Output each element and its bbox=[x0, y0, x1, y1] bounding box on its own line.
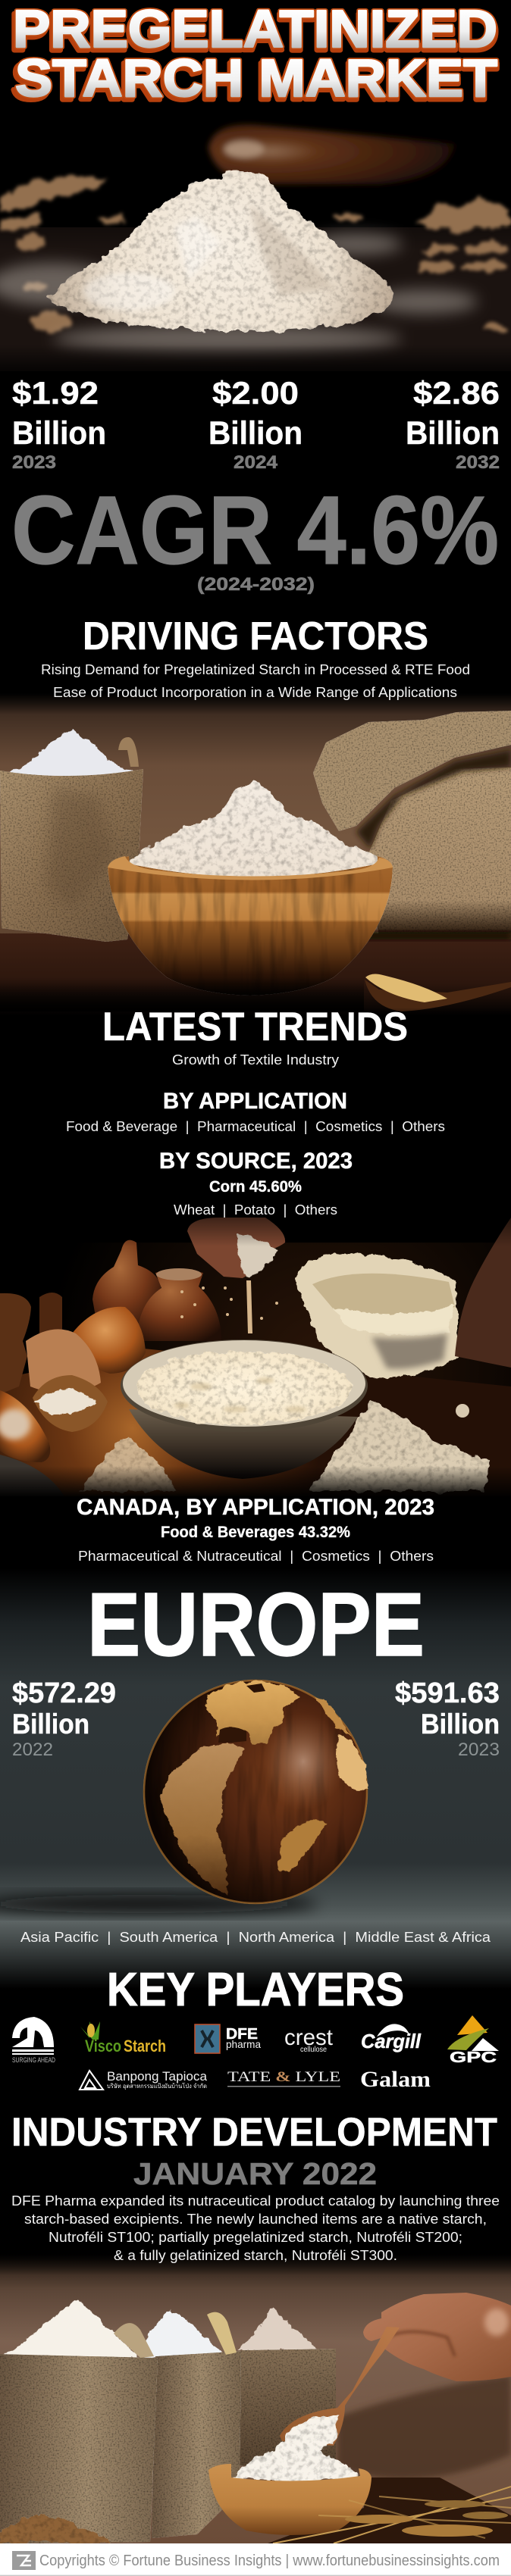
logo: DFE pharma: pharma bbox=[226, 2038, 261, 2050]
title bbox=[11, 0, 498, 111]
heading: Europe: EUROPE bbox=[87, 1574, 425, 1675]
scooped flour and heap bbox=[231, 2415, 361, 2481]
grain pile bbox=[0, 2515, 114, 2543]
flour in bowl bbox=[125, 780, 383, 879]
logo: GPC bbox=[447, 2015, 499, 2066]
development description bbox=[11, 2193, 500, 2263]
market value 2032: 2032 bbox=[456, 452, 500, 473]
blurred brown bowl in background bbox=[208, 124, 455, 184]
image: sacks of flour with spoon and wheat bbox=[0, 2254, 511, 2543]
development description: DFE Pharma expanded its nutraceutical product catalog by launching three bbox=[11, 2193, 500, 2209]
application segments: Food & Beverage | Pharmaceutical | Cosmetics | Others bbox=[66, 1119, 445, 1134]
left sack with flour bbox=[0, 729, 143, 942]
clay pots bbox=[0, 1240, 221, 1394]
Canada leading share: Food & Beverages 43.32% bbox=[161, 1524, 350, 1541]
market value 2024: $2.00 bbox=[212, 375, 299, 411]
logo: Crest cellulose: cellulose bbox=[300, 2046, 327, 2054]
Europe value 2022: 2022 bbox=[12, 1740, 53, 1760]
market value 2024: 2024 bbox=[234, 452, 278, 473]
Europe value 2023: Billion bbox=[421, 1708, 500, 1740]
heading: by source: BY SOURCE, 2023 bbox=[159, 1149, 353, 1174]
first sack bbox=[0, 2354, 158, 2543]
title: PREGELATINIZED bbox=[11, 2, 498, 61]
shadow on wall bbox=[337, 2375, 511, 2479]
flour peaks in sacks bbox=[0, 2299, 318, 2358]
market value 2023: $1.92 bbox=[12, 375, 99, 411]
breads bbox=[0, 1307, 146, 1496]
logo: GPC: GPC bbox=[450, 2049, 497, 2066]
Europe value 2023: $591.63 bbox=[395, 1677, 500, 1709]
heading: latest trends: LATEST TRENDS bbox=[102, 1005, 408, 1049]
Europe value 2022 bbox=[12, 1677, 116, 1760]
heading: key players: KEY PLAYERS bbox=[107, 1964, 404, 2016]
heading: driving factors: DRIVING FACTORS bbox=[83, 614, 428, 658]
title: STARCH MARKET bbox=[15, 48, 497, 108]
hand sifting flour bbox=[180, 1218, 285, 1333]
logo: Cargill: Cargill bbox=[361, 2030, 422, 2052]
image: wooden bowl of flour with sacks bbox=[0, 693, 511, 1023]
market value 2023 bbox=[12, 375, 106, 473]
flour sack bowl bbox=[295, 1253, 459, 1379]
title: STARCH MARKET bbox=[15, 48, 497, 108]
logo: DFE pharma: DFE bbox=[226, 2026, 258, 2043]
logo: Crest cellulose: crest bbox=[284, 2025, 334, 2050]
logo: Surging Ahead: SURGING AHEAD bbox=[12, 2056, 55, 2064]
other regions: Asia Pacific | South America | North America | Middle East & Africa bbox=[20, 1930, 491, 1945]
wooden spoon bbox=[280, 2327, 400, 2446]
third sack bbox=[235, 2349, 336, 2466]
spilled flour bbox=[81, 1402, 489, 1491]
logo: Banpong Tapioca bbox=[80, 2069, 208, 2090]
logo: Banpong Tapioca: บริษัท อุตสาหกรรมแป้งมันบ้านโป่ง จำกัด bbox=[107, 2082, 207, 2090]
driving factors list: Ease of Product Incorporation in a Wide Range of Applications bbox=[53, 685, 457, 700]
market value 2023: 2023 bbox=[12, 452, 56, 473]
development description: & a fully gelatinized starch, Nutroféli ST300. bbox=[114, 2248, 397, 2263]
market value 2032: $2.86 bbox=[413, 375, 500, 411]
logo: Visco Starch: Visco bbox=[85, 2037, 121, 2055]
logo: Visco Starch bbox=[80, 2021, 166, 2055]
market value 2023: Billion bbox=[12, 415, 106, 452]
wooden bowl bbox=[208, 2464, 371, 2535]
hand holding spoon bbox=[363, 2293, 511, 2381]
logo: Tate & Lyle: TATE & LYLE bbox=[227, 2069, 340, 2085]
development description: Nutroféli ST100; partially pregelatinized starch, Nutroféli ST200; bbox=[49, 2230, 462, 2245]
driving factors list: Rising Demand for Pregelatinized Starch in Processed & RTE Food bbox=[41, 662, 470, 677]
Europe value 2023: 2023 bbox=[458, 1740, 500, 1760]
development description: starch-based excipients. The newly launched items are a native starch, bbox=[24, 2212, 487, 2227]
logo: DFE pharma bbox=[195, 2024, 261, 2053]
logo: Visco Starch: Starch bbox=[124, 2037, 166, 2055]
Europe value 2023 bbox=[395, 1677, 500, 1760]
right hand bbox=[455, 1218, 511, 1368]
spoon with powder bbox=[365, 974, 511, 1011]
scattered crumbs bbox=[0, 176, 511, 332]
driving factors list bbox=[41, 662, 470, 700]
globe shadow bbox=[0, 1895, 318, 1913]
hero image: flour heap on dark table bbox=[0, 124, 511, 379]
wooden globe bbox=[143, 1680, 368, 1904]
market value 2024: Billion bbox=[208, 415, 303, 452]
title: STARCH MARKET bbox=[12, 52, 497, 111]
panel: Europe bbox=[0, 1568, 511, 1989]
leading source share: Corn 45.60% bbox=[209, 1178, 302, 1196]
development date: JANUARY 2022 bbox=[133, 2156, 377, 2191]
Canada segments: Pharmaceutical & Nutraceutical | Cosmetics | Others bbox=[78, 1549, 434, 1564]
sack handles bbox=[114, 2312, 237, 2358]
spilled flour dust bbox=[0, 233, 478, 352]
logo: Surging Ahead bbox=[12, 2017, 55, 2064]
right sack bbox=[313, 711, 511, 939]
latest trends item: Growth of Textile Industry bbox=[172, 1052, 339, 1068]
market value 2032 bbox=[406, 375, 500, 473]
market value 2024 bbox=[208, 375, 303, 473]
image: flour bowl on rustic table bbox=[0, 1212, 511, 1498]
Europe value 2022: Billion bbox=[12, 1708, 89, 1740]
market value 2032: Billion bbox=[406, 415, 500, 452]
logo: Galam: Galam bbox=[360, 2067, 431, 2092]
title: PREGELATINIZED bbox=[13, 0, 497, 58]
title: PREGELATINIZED bbox=[13, 0, 497, 58]
footer bar bbox=[0, 2543, 511, 2576]
wooden bowl bbox=[108, 856, 393, 996]
second sack bbox=[152, 2351, 241, 2538]
heading: by application: BY APPLICATION bbox=[163, 1089, 347, 1114]
logo: Banpong Tapioca: Banpong Tapioca bbox=[107, 2069, 208, 2084]
flour heap bbox=[49, 171, 393, 331]
large mixing bowl bbox=[121, 1340, 368, 1479]
footer logo bbox=[12, 2551, 36, 2570]
Europe value 2022: $572.29 bbox=[12, 1677, 116, 1709]
table and wheat bed bbox=[268, 2478, 511, 2543]
small wooden bowl bbox=[33, 1375, 108, 1432]
heap shading bbox=[83, 205, 334, 311]
CAGR period: (2024-2032) bbox=[197, 574, 315, 595]
wheat stalks bbox=[273, 2487, 511, 2543]
source segments: Wheat | Potato | Others bbox=[174, 1202, 337, 1218]
heading: Canada by application: CANADA, BY APPLICATION, 2023 bbox=[77, 1495, 434, 1520]
